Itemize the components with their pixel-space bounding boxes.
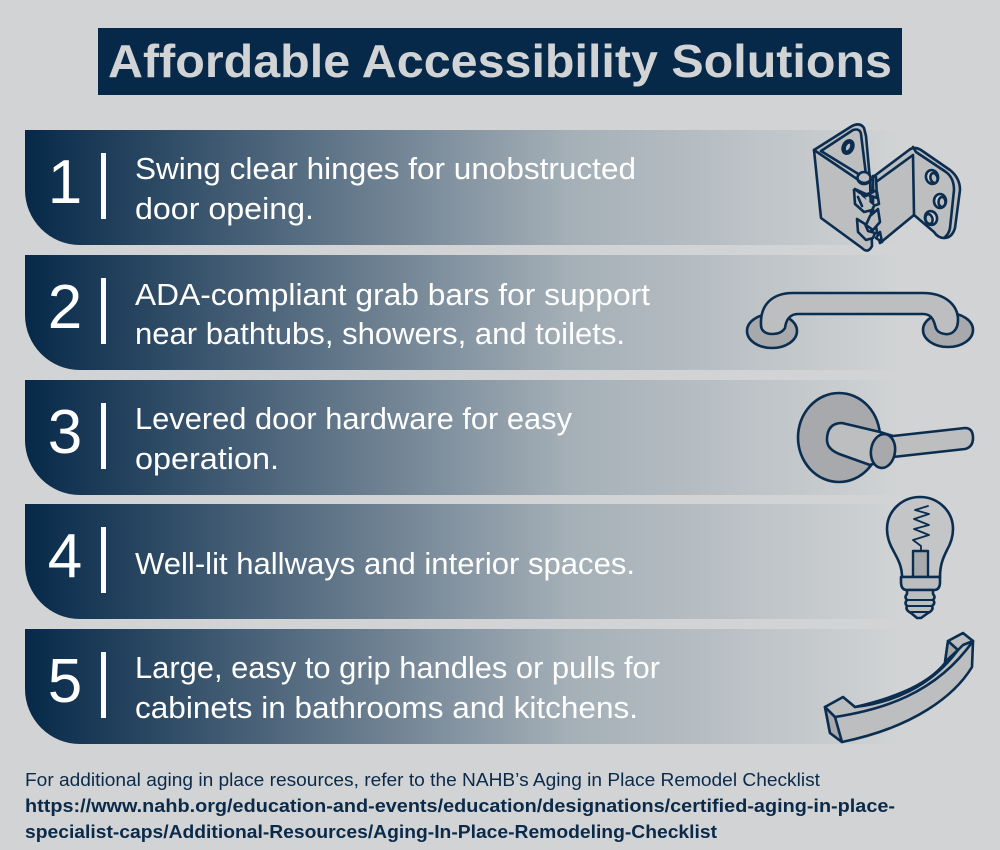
panel: item 1	[25, 130, 900, 245]
title: Affordable Accessibility Solutions	[108, 35, 892, 87]
panel: item 1: 1	[48, 148, 82, 217]
panel: item 4: 4	[48, 522, 82, 591]
footer text: https://www.nahb.org/education-and-events/education/designations/certified-aging-in-place-	[25, 796, 895, 816]
icon: light bulb	[887, 497, 953, 618]
panel: item 3	[25, 380, 900, 495]
panel: item 2: near bathtubs, showers, and toilets.	[135, 316, 625, 351]
panel: item 2: ADA-compliant grab bars for support	[135, 277, 650, 312]
icon: door lever	[798, 393, 973, 482]
panel: item 2: 2	[48, 273, 82, 342]
panel: item 4: Well-lit hallways and interior spaces.	[135, 546, 635, 581]
panel: item 3: operation.	[135, 441, 279, 476]
panel: item 4	[25, 504, 900, 619]
footer text: For additional aging in place resources, refer to the NAHB’s Aging in Place Remodel Checklist	[25, 770, 820, 790]
footer text	[25, 770, 895, 842]
panel: item 5: Large, easy to grip handles or pulls for	[135, 650, 660, 685]
panel: item 3: Levered door hardware for easy	[135, 401, 572, 436]
panel: item 5: 5	[48, 647, 82, 716]
icon: cabinet pull	[825, 633, 973, 742]
panel: item 5: cabinets in bathrooms and kitchens.	[135, 690, 638, 725]
icon: grab bar	[747, 293, 973, 348]
footer text: specialist-caps/Additional-Resources/Aging-In-Place-Remodeling-Checklist	[25, 822, 717, 842]
panel: item 2	[25, 255, 900, 370]
panel: item 5	[25, 629, 900, 744]
icon: hinge	[814, 124, 960, 251]
panel: item 3: 3	[48, 398, 82, 467]
panel: item 1: door opeing.	[135, 191, 314, 226]
panel: item 1: Swing clear hinges for unobstructed	[135, 151, 636, 186]
